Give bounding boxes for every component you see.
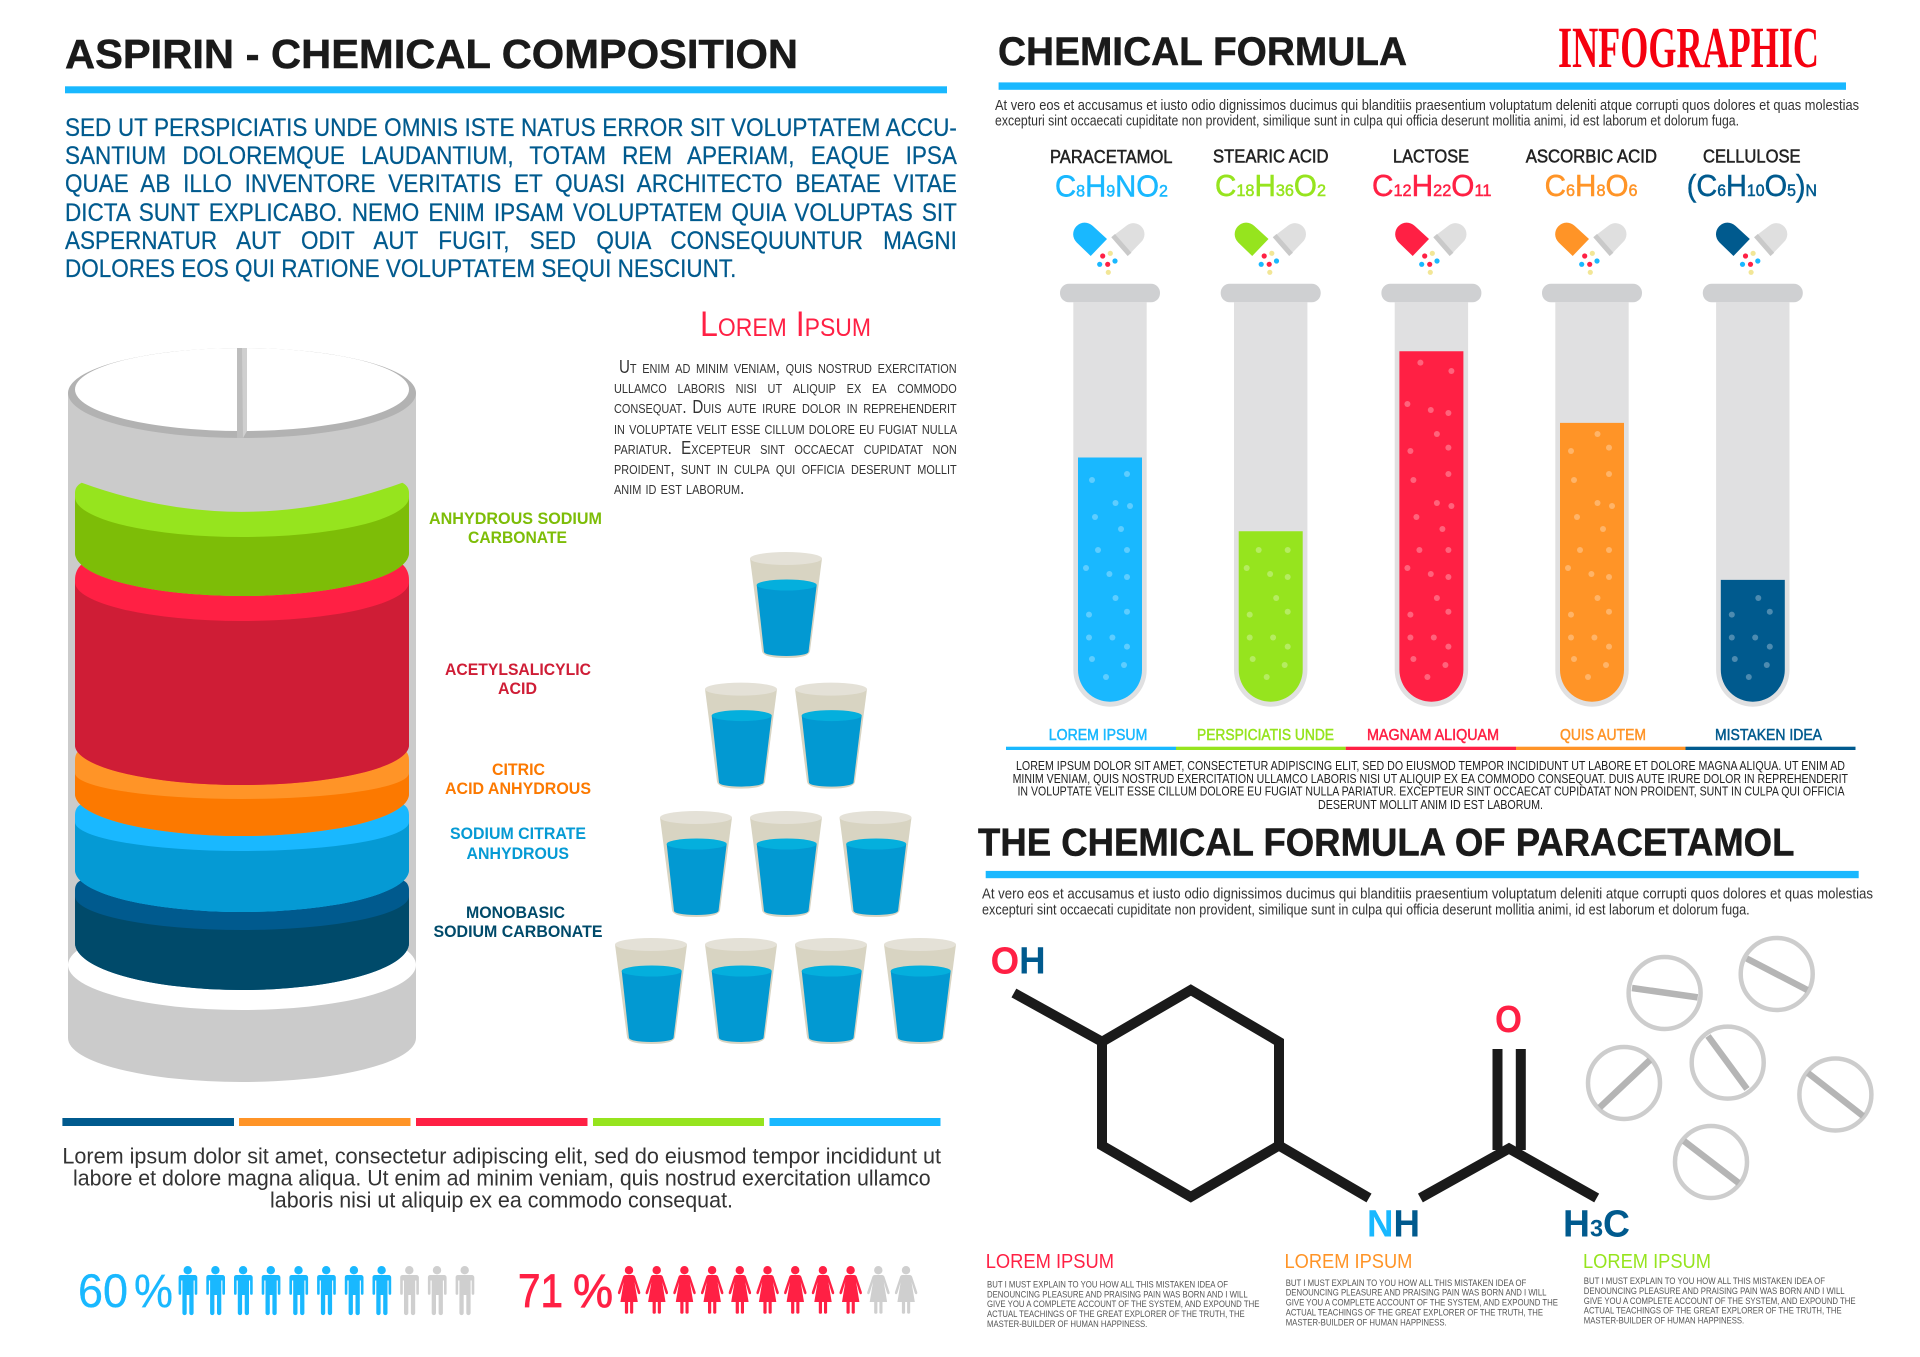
column: orange lorem ipsum: GIVE YOU A COMPLETE ACCOUNT OF THE SYSTEM, AND EXPOUND THE [1286,1298,1558,1308]
value: 60% [78,1264,173,1317]
formula: C8H9NO2 [1055,168,1168,204]
column: green lorem ipsum: BUT I MUST EXPLAIN TO YOU HOW ALL THIS MISTAKEN IDEA OF [1584,1276,1825,1287]
test tube: ascorbic acid [1526,146,1657,707]
test tube: lactose [1372,146,1491,707]
label: sodium citrate anhydrous: SODIUM CITRATE [450,824,586,843]
formula: C12H22O11 [1372,168,1491,203]
text block: uppercase lorem paragraph [1013,758,1848,812]
heading: chemical formula: CHEMICAL FORMULA [998,30,1407,74]
text block: small caps paragraph: pariatur. Excepteur sint occaecat cupidatat non [614,438,957,458]
label: monobasic sodium carbonate: SODIUM CARBONATE [434,922,602,941]
formula: C18H36O2 [1215,168,1326,203]
tube [1703,284,1803,707]
text block: small caps paragraph: Ut enim ad minim veniam, quis nostrud exercitation [619,357,957,377]
column: green lorem ipsum [1583,1251,1856,1327]
column: orange lorem ipsum [1284,1251,1558,1328]
column: green lorem ipsum: LOREM IPSUM [1583,1251,1711,1273]
legend row under tubes: QUIS AUTEM [1560,727,1646,744]
text block: blue uppercase intro [64,114,957,283]
layer: monobasic sodium carbonate [75,879,409,990]
text block: small caps paragraph: ullamco laboris nisi ut aliquip ex ea commodo [614,377,957,397]
column: green lorem ipsum: MASTER-BUILDER OF HUMAN HAPPINESS. [1584,1316,1744,1327]
text block: small caps paragraph: proident, sunt in culpa qui officia deserunt mollit [614,458,957,478]
text block: uppercase lorem paragraph: DESERUNT MOLLIT ANIM ID EST LABORUM. [1318,797,1543,812]
legend row under tubes: MISTAKEN IDEA [1715,727,1823,744]
label: monobasic sodium carbonate: MONOBASIC [466,903,565,922]
legend row under tubes: PERSPICIATIS UNDE [1197,727,1334,744]
text block: intro paracetamol: excepturi sint occaecati cupiditate non provident, similique sunt in culpa qui officia deserunt mollitia animi, id est laborum et dolorum fuga. [982,902,1750,918]
column: green lorem ipsum: DENOUNCING PLEASURE AND PRAISING PAIN WAS BORN AND I WILL [1584,1286,1845,1297]
label: anhydrous sodium carbonate: ANHYDROUS SODIUM [429,509,602,528]
icon: capsule [1235,223,1306,275]
tube [1542,284,1642,707]
tube [1221,284,1321,707]
label: acetylsalicylic acid [445,660,591,698]
test tube: cellulose [1687,146,1817,707]
pyramid of water glasses [615,552,956,1044]
colored divider bars [62,1118,940,1126]
name: PARACETAMOL [1050,147,1172,167]
tablet top face [68,348,416,438]
column: red lorem ipsum: ACTUAL TEACHINGS OF THE GREAT EXPLORER OF THE TRUTH, THE [987,1309,1245,1320]
text block: lorem ipsum summary [62,1144,941,1213]
test tube: stearic acid [1213,146,1328,707]
legend row under tubes [1006,727,1856,750]
column: green lorem ipsum: ACTUAL TEACHINGS OF THE GREAT EXPLORER OF THE TRUTH, THE [1584,1306,1842,1317]
icon: capsule [1073,223,1144,275]
atom: O: O [1495,999,1522,1041]
label: citric acid anhydrous [445,760,591,798]
stat: 71 percent women [518,1264,917,1317]
text block: lorem ipsum summary: labore et dolore magna aliqua. Ut enim ad minim veniam, quis nostrud exercitation ullamco [73,1166,931,1191]
formula: C6H8O6 [1545,168,1638,203]
text block: small caps paragraph: anim id est laborum. [614,478,744,498]
pictogram row: women [618,1266,917,1314]
column: orange lorem ipsum: LOREM IPSUM [1284,1251,1412,1273]
text block: lorem ipsum summary: Lorem ipsum dolor sit amet, consectetur adipiscing elit, sed do eiusmod tempor incididunt ut [62,1144,941,1169]
stat: 60 percent men [78,1264,474,1317]
value: 71%: % [573,1264,613,1317]
tablet body [68,393,416,1082]
layer: anhydrous sodium carbonate [75,483,409,596]
label: acetylsalicylic acid: ACID [498,679,537,698]
label: acetylsalicylic acid: ACETYLSALICYLIC [445,660,591,679]
label: sodium citrate anhydrous: ANHYDROUS [466,844,569,863]
atom: OH: OH [991,941,1046,983]
name: STEARIC ACID [1213,146,1328,166]
label: anhydrous sodium carbonate [429,509,602,547]
name: ASCORBIC ACID [1526,146,1657,166]
text block: blue uppercase intro: ASPERNATUR AUT ODIT AUT FUGIT, SED QUIA CONSEQUUNTUR MAGNI [65,227,957,255]
legend row under tubes: MAGNAM ALIQUAM [1367,727,1499,744]
paracetamol molecule diagram [991,941,1630,1246]
tablet cylinder chart [68,348,416,1082]
text block: small caps paragraph: in voluptate velit esse cillum dolore eu fugiat nulla [614,418,957,438]
label: monobasic sodium carbonate [434,903,602,941]
value: 60%: % [134,1264,173,1317]
heading: the chemical formula of paracetamol: THE CHEMICAL FORMULA OF PARACETAMOL [978,822,1794,865]
label: sodium citrate anhydrous [450,824,586,863]
title: aspirin chemical composition [65,31,947,93]
heading: lorem ipsum: Lorem Ipsum [700,305,871,344]
column: orange lorem ipsum: MASTER-BUILDER OF HUMAN HAPPINESS. [1286,1317,1447,1328]
name: CELLULOSE [1703,146,1801,166]
text block: intro chemical formula [995,98,1859,129]
tube [1060,284,1160,707]
scattered pills [1588,938,1871,1198]
text block: blue uppercase intro: QUAE AB ILLO INVENTORE VERITATIS ET QUASI ARCHITECTO BEATAE VITAE [65,170,957,198]
label: citric acid anhydrous: ACID ANHYDROUS [445,779,591,798]
text block: intro chemical formula: excepturi sint occaecati cupiditate non provident, similique sunt in culpa qui officia deserunt mollitia animi, id est laborum et dolorum fuga. [995,113,1739,129]
name: LACTOSE [1393,146,1469,166]
label: citric acid anhydrous: CITRIC [492,760,545,779]
layer: citric acid anhydrous [75,748,409,836]
column: red lorem ipsum [986,1251,1259,1330]
column: red lorem ipsum: MASTER-BUILDER OF HUMAN HAPPINESS. [987,1319,1147,1330]
text block: intro paracetamol [982,886,1873,918]
column: orange lorem ipsum: DENOUNCING PLEASURE AND PRAISING PAIN WAS BORN AND I WILL [1286,1288,1546,1299]
cylinder labels [429,509,602,941]
column: orange lorem ipsum: ACTUAL TEACHINGS OF THE GREAT EXPLORER OF THE TRUTH, THE [1286,1307,1543,1318]
column: green lorem ipsum: GIVE YOU A COMPLETE ACCOUNT OF THE SYSTEM, AND EXPOUND THE [1584,1296,1856,1307]
column: red lorem ipsum: BUT I MUST EXPLAIN TO YOU HOW ALL THIS MISTAKEN IDEA OF [987,1280,1228,1290]
text block: lorem ipsum summary: laboris nisi ut aliquip ex ea commodo consequat. [270,1188,733,1213]
formula: (C6H10O5)N [1687,168,1817,203]
text block: blue uppercase intro: DICTA SUNT EXPLICABO. NEMO ENIM IPSAM VOLUPTATEM QUIA VOLUPTAS SIT [65,198,957,226]
tube [1381,284,1481,707]
pictogram row: men [179,1266,474,1315]
test tube: paracetamol [1050,147,1172,707]
icon: capsule [1555,223,1626,275]
icon: capsule [1395,223,1466,275]
value: 71% [518,1264,613,1317]
layer: acetylsalicylic acid [75,564,409,785]
legend row under tubes: LOREM IPSUM [1049,727,1147,744]
title: aspirin chemical composition: ASPIRIN - CHEMICAL COMPOSITION [65,31,798,77]
text block: small caps paragraph: consequat. Duis aute irure dolor in reprehenderit [614,397,957,417]
text block: blue uppercase intro: SED UT PERSPICIATIS UNDE OMNIS ISTE NATUS ERROR SIT VOLUPTATEM ACCU- [65,114,957,142]
column: red lorem ipsum: DENOUNCING PLEASURE AND PRAISING PAIN WAS BORN AND I WILL [987,1289,1248,1300]
value: 71%: 71 [518,1264,563,1317]
column: red lorem ipsum: GIVE YOU A COMPLETE ACCOUNT OF THE SYSTEM, AND EXPOUND THE [987,1299,1259,1310]
icon: capsule [1716,223,1787,275]
text block: blue uppercase intro: SANTIUM DOLOREMQUE LAUDANTIUM, TOTAM REM APERIAM, EAQUE IPSA [65,142,957,170]
column: orange lorem ipsum: BUT I MUST EXPLAIN TO YOU HOW ALL THIS MISTAKEN IDEA OF [1286,1278,1526,1289]
bonds [1014,990,1597,1198]
text block: blue uppercase intro: DOLORES EOS QUI RATIONE VOLUPTATEM SEQUI NESCIUNT. [65,255,736,283]
text block: small caps paragraph [614,357,957,498]
atom: H3C: H3C [1563,1204,1630,1246]
atom: NH: NH [1367,1204,1420,1246]
label: anhydrous sodium carbonate: CARBONATE [468,528,567,547]
layer: sodium citrate anhydrous [75,803,409,912]
column: red lorem ipsum: LOREM IPSUM [986,1251,1114,1273]
heading: chemical formula [998,30,1846,90]
value: 60%: 60 [78,1264,128,1317]
